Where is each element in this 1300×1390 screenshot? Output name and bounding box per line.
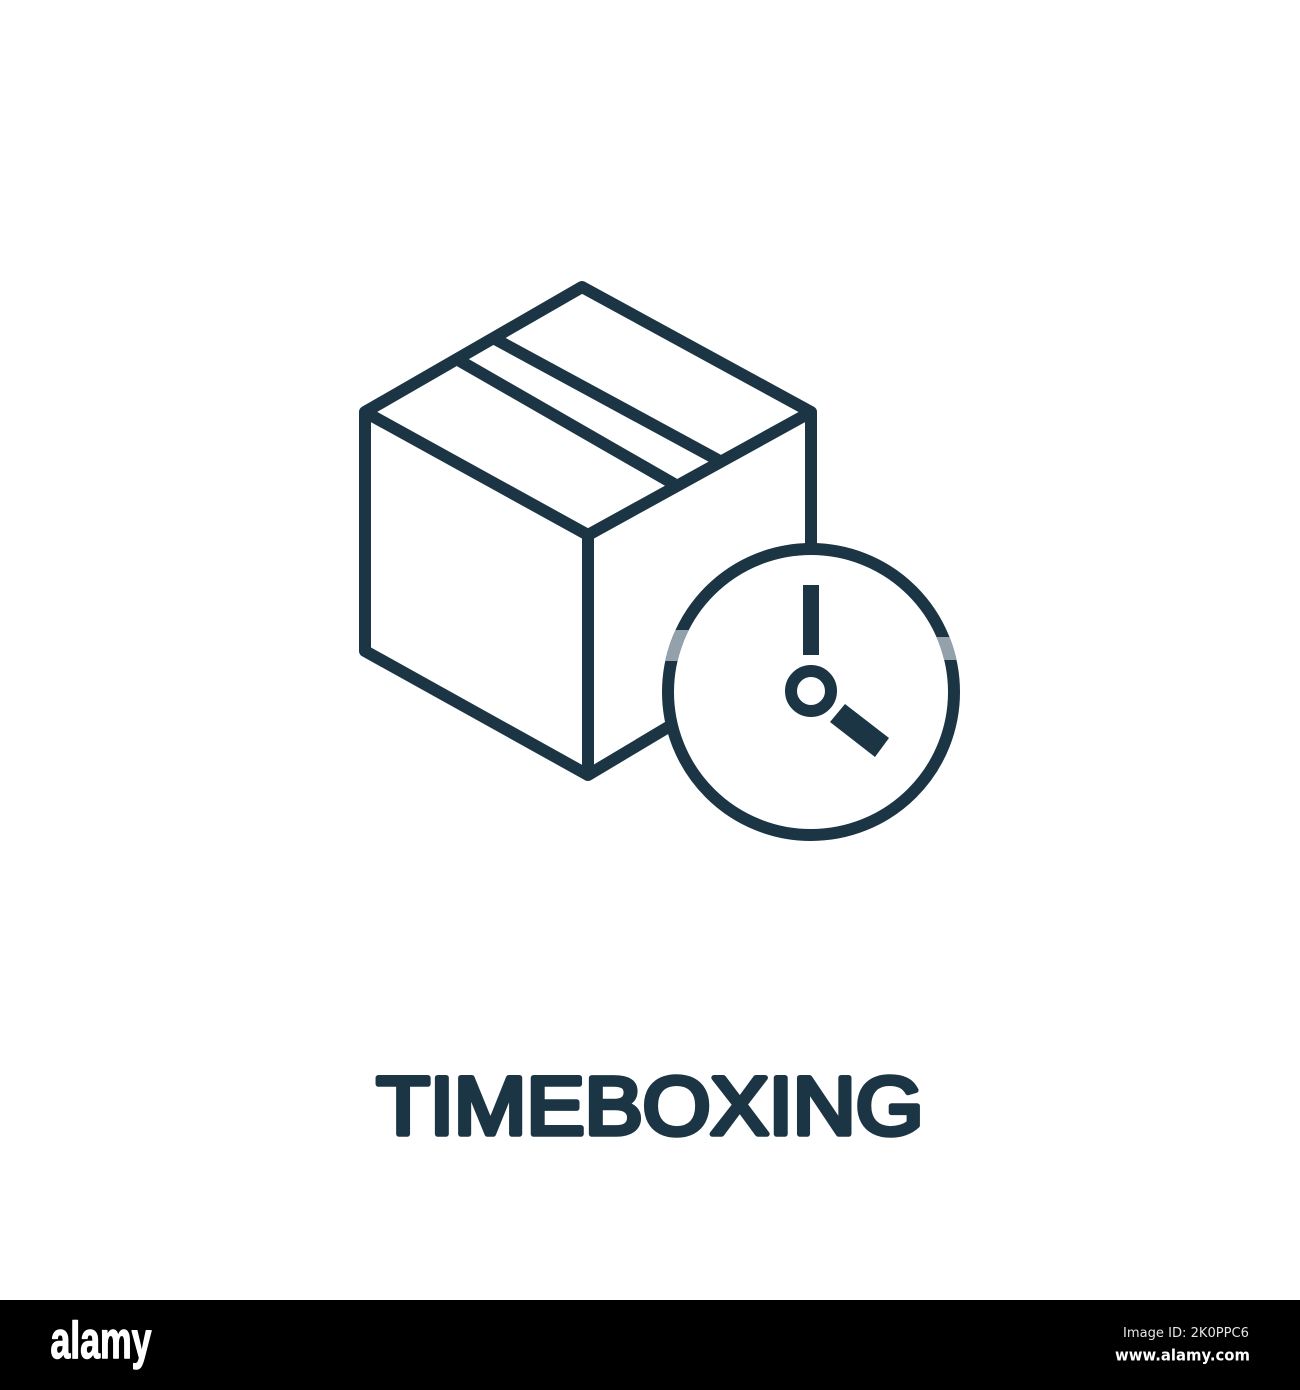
footer logo: alamy [50,1312,152,1370]
infographic canvas [0,281,1300,1390]
icon: box tape strip [460,339,718,484]
icon: cardboard box [365,287,811,775]
icon: clock [668,549,954,835]
clock hour hand [830,704,889,757]
clock hub [791,671,831,711]
icon: timeboxing box with clock [365,287,954,835]
website: www.alamy.com [1115,1346,1250,1364]
title: TIMEBOXING [376,1061,924,1152]
clock minute hand [803,585,819,655]
footer bar [0,1300,1300,1390]
watermark traces on clock ring [665,630,956,661]
image id: Image ID: 2K0PPC6 [1123,1326,1249,1341]
